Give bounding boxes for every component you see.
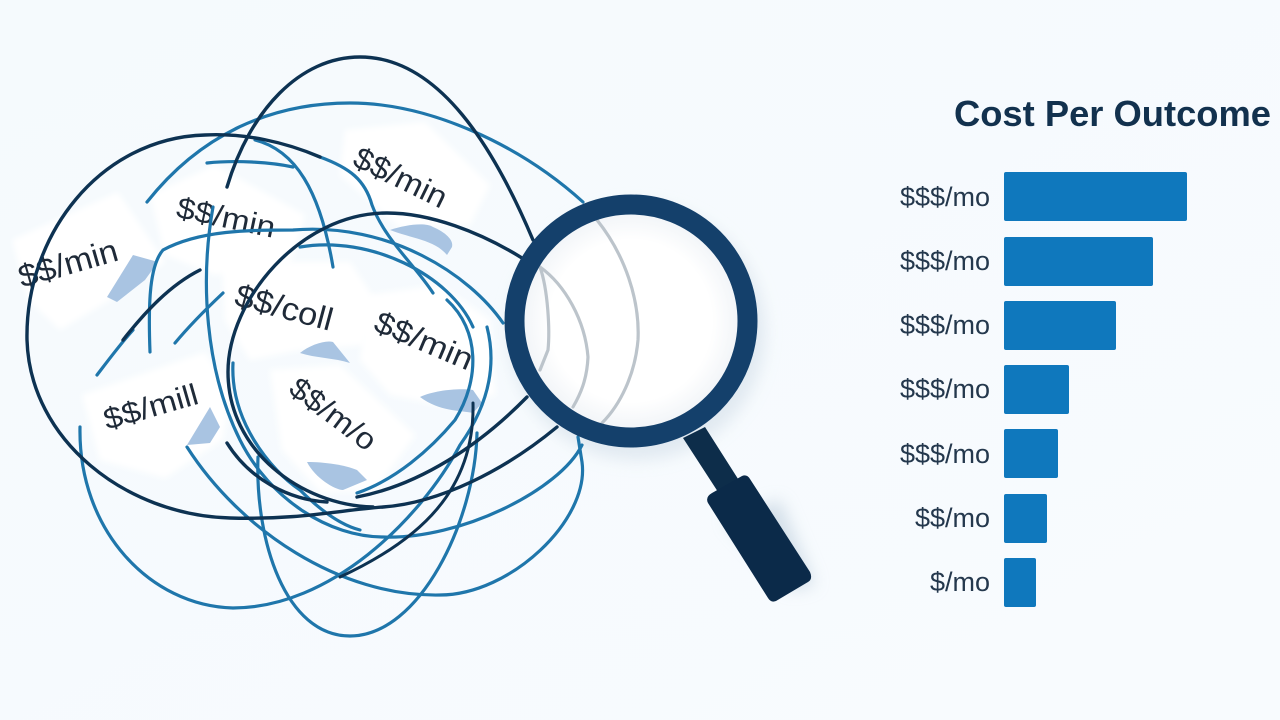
row 4: $$$/mo [900,374,990,404]
row 2 [900,237,1153,286]
grey loops through lens [540,220,638,423]
row 3 [900,301,1116,350]
row 2: $$$/mo [900,246,990,276]
panel: tangled price scraps [12,122,495,492]
scrap: $$/coll: $$/coll [231,277,337,338]
scrap: $$/min top: $$/min [348,140,453,215]
row 1 [900,172,1187,221]
row 5: $$$/mo [900,439,990,469]
lens ring [514,204,748,438]
scrap: $$/min top [340,122,490,255]
row 1: $$$/mo [900,182,990,212]
row 4 [900,365,1069,414]
scrap: $$/min top-left [150,165,305,275]
row 7: $/mo [930,567,990,597]
lens glass [515,205,747,437]
icon: magnifying glass [514,204,815,602]
scrap: $$/mill bottom-left [82,352,232,478]
bar chart [900,172,1187,607]
row 5 [900,429,1058,478]
scrap: $$/coll [222,262,375,363]
row 3: $$$/mo [900,310,990,340]
scrap: $$/min top-left: $$/min [174,192,278,245]
scrap: $$/min left [12,192,165,330]
row 6: $$/mo [915,503,990,533]
handle shadow [725,500,815,590]
neck [683,427,740,495]
scrap: $$/min right: $$/min [369,304,479,377]
glass soft shadow [509,204,765,460]
scrap: $$/m/o bottom: $$/m/o [283,371,383,458]
handle [707,475,811,602]
blue loops [80,103,583,636]
row 7 [930,558,1036,607]
row 6 [915,494,1047,543]
scrap: $$/m/o bottom [270,365,415,492]
chart: tangled loops [27,57,583,636]
scrap: $$/min left: $$/min [14,232,122,295]
dark loops [27,57,557,577]
scrap: $$/min right [360,285,495,413]
title: Cost Per Outcome [954,93,1271,134]
scrap: $$/mill bottom-left: $$/mill [100,378,202,437]
